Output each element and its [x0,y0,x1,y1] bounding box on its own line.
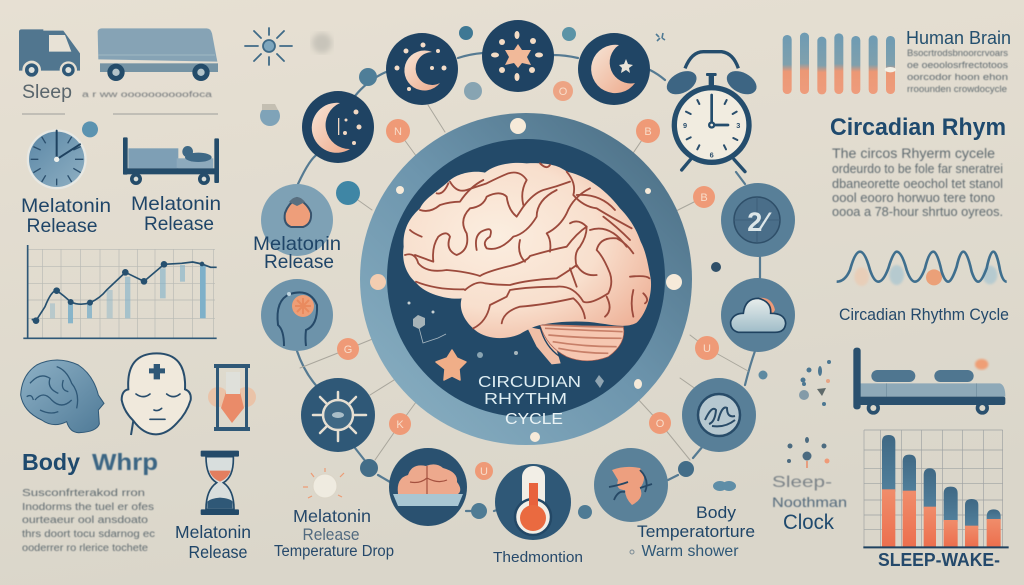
icon: crescent moon at night [386,33,458,105]
heading: body whrp: Body [22,449,80,475]
label: body temperature warm shower: Temperatorture [637,522,755,541]
icon: brain on a tray [389,448,467,526]
text block: body whrp description: ourteaeur ool ansdoato [22,515,149,526]
text block: body whrp description: ooderrer ro rlerice tochete [22,543,148,554]
icon: wall clock [27,121,98,189]
label: sleep nocturnal clock: Sleep- [772,474,832,491]
icon: melatonin gland [261,184,333,256]
icon: scattered particles [799,360,831,406]
icon: alarm clock: 9 [683,121,687,130]
ring dots [370,118,682,442]
text block: circadian description: ordeurdo to be fole far sneratrei [832,162,1003,176]
heading: circadian rhythm cycle: Circadian Rhythm Cycle [839,306,1009,324]
brain illustration [403,163,651,364]
dial title: RHYTHM [484,391,567,408]
text block: circadian description: dbaneorette oeochol tet stanol [832,177,1003,191]
icon: right bed [853,348,1005,415]
icon: thermometer [495,464,571,540]
dial title: CYCLE [505,411,563,428]
dial title: CIRCUDIAN [478,374,581,391]
label: melatonin release right [131,193,221,235]
text block: human brain description [907,48,1009,94]
label: melatonin release bottom [175,522,251,562]
label: melatonin release left: Melatonin [21,195,111,217]
label: melatonin release right: Release [144,213,214,235]
text block: circadian description: oool eooro horwuo tere tono [832,191,995,205]
label: melatonin release in circle column: Release [264,251,334,273]
icon: 24 hour dial: 2⁄ [747,207,772,237]
text block: circadian description: oooa a 78-hour shrtuo oyreos. [832,205,1003,219]
text block: body whrp description [22,488,155,554]
icon: alarm clock: 6 [710,150,714,159]
icon: cloud [721,278,795,352]
icon: swirl medallion [682,378,756,452]
icon: clock radial dots [787,437,830,468]
dial title [478,374,581,428]
label: melatonin release temperature drop: Release [302,525,360,544]
text block: body whrp description: thrs doort tocu sdarnog ec [22,529,155,540]
label: sleep nocturnal clock: Noothman [772,494,847,510]
heading: human brain: Human Brain [906,27,1011,48]
text block: human brain description: Bsocrtrodsbnoorcrvoars [907,48,1009,58]
orange numbered nodes: K [396,419,404,431]
orange numbered nodes: B [700,192,708,204]
dial outer ring [360,113,692,445]
orange numbered nodes [337,81,719,480]
orange numbered nodes: U [480,466,488,478]
chart: circadian wave [837,252,1007,286]
label: melatonin release bottom: Melatonin [175,522,251,542]
icon: warm shower splash [594,448,668,522]
orange numbered nodes: G [344,344,352,356]
label: melatonin release bottom: Release [188,542,248,562]
text block: human brain description: oorcodor hoon ehon [907,72,1008,82]
icon: head with orange brain [261,279,333,351]
icon: crescent moon with sparkles [302,91,374,163]
icon: 24 hour dial [721,183,795,257]
label: melatonin release in circle column: Melatonin [253,233,341,255]
cerebellum [527,325,624,364]
bar chart: sleep-wake [863,430,1009,547]
text block: circadian description [832,145,1003,219]
icon: glowing pill sun [303,468,344,498]
label: melatonin release left [21,195,111,237]
orange numbered nodes: B [644,126,652,138]
label: melatonin release temperature drop: Melatonin [293,506,371,526]
icon: trailer [98,28,218,81]
heading: body whrp: Whrp [92,449,158,475]
icon: blue brain profile [21,360,104,433]
icon: alarm clock: 3 [736,121,740,130]
text block: circadian description: The circos Rhyerm cycele [832,145,995,161]
icon: delivery truck [19,29,80,79]
icon: sleeping face [122,353,191,435]
dial inner disc [387,139,665,417]
icon: orange flask hourglass [208,364,256,431]
central brain dial [360,113,692,445]
label: melatonin release temperature drop [274,506,394,560]
icon: hourglass [201,451,239,515]
orange numbered nodes: O [656,418,665,430]
line chart [23,245,217,338]
heading: circadian rhym: Circadian Rhym [830,114,1006,141]
icon: bed [123,137,219,185]
text block: body whrp description: Susconfrterakod rron [22,488,145,499]
constellation details [408,302,604,388]
text block: human brain description: rroounden crowdocycle [907,84,1007,94]
central ring connector lines and network arcs [297,53,760,511]
bar gauges [783,33,896,94]
label: sleep [22,82,213,103]
text block: human brain description: oe oeoolosrfrectotoos [907,60,1009,70]
panel: right column [772,27,1011,570]
orange numbered nodes: O [559,86,568,98]
label: body temperature warm shower: Warm shower [642,543,739,560]
small blue nodes [336,26,768,519]
heading: body whrp [22,449,158,475]
cerebrum outline [403,163,651,338]
label: sleep: Sleep [22,82,72,103]
label: thermometer: Thedmontion [493,549,583,566]
icon: star burst [482,20,554,92]
label: melatonin release in circle column [253,233,341,273]
faint decorative icons [260,33,665,126]
label: sleep nocturnal clock: Clock [783,511,834,534]
icon: crescent moon and star [578,33,650,105]
label: melatonin release temperature drop: Temperature Drop [274,543,394,560]
orange numbered nodes: N [394,126,402,138]
icon: sun wheel [301,378,375,452]
cerebrum folds [405,163,649,328]
label: melatonin release left: Release [26,215,98,237]
label: sleep nocturnal clock [772,474,847,534]
panel: left column [19,28,256,562]
text block: body whrp description: Inodorms the tuel er ofes [22,502,154,513]
icon: alarm clock [663,52,760,172]
label: body temperature warm shower [630,503,755,560]
icon: sun spokes [245,28,292,65]
label: body temperature warm shower: Body [696,503,737,522]
orange numbered nodes: U [703,343,711,355]
label: sleep: a r ww oooooooooofoca [82,90,213,99]
label: melatonin release right: Melatonin [131,193,221,215]
label: sleep-wake: SLEEP-WAKE- [878,550,1000,570]
icon: small twin dots [713,481,736,491]
